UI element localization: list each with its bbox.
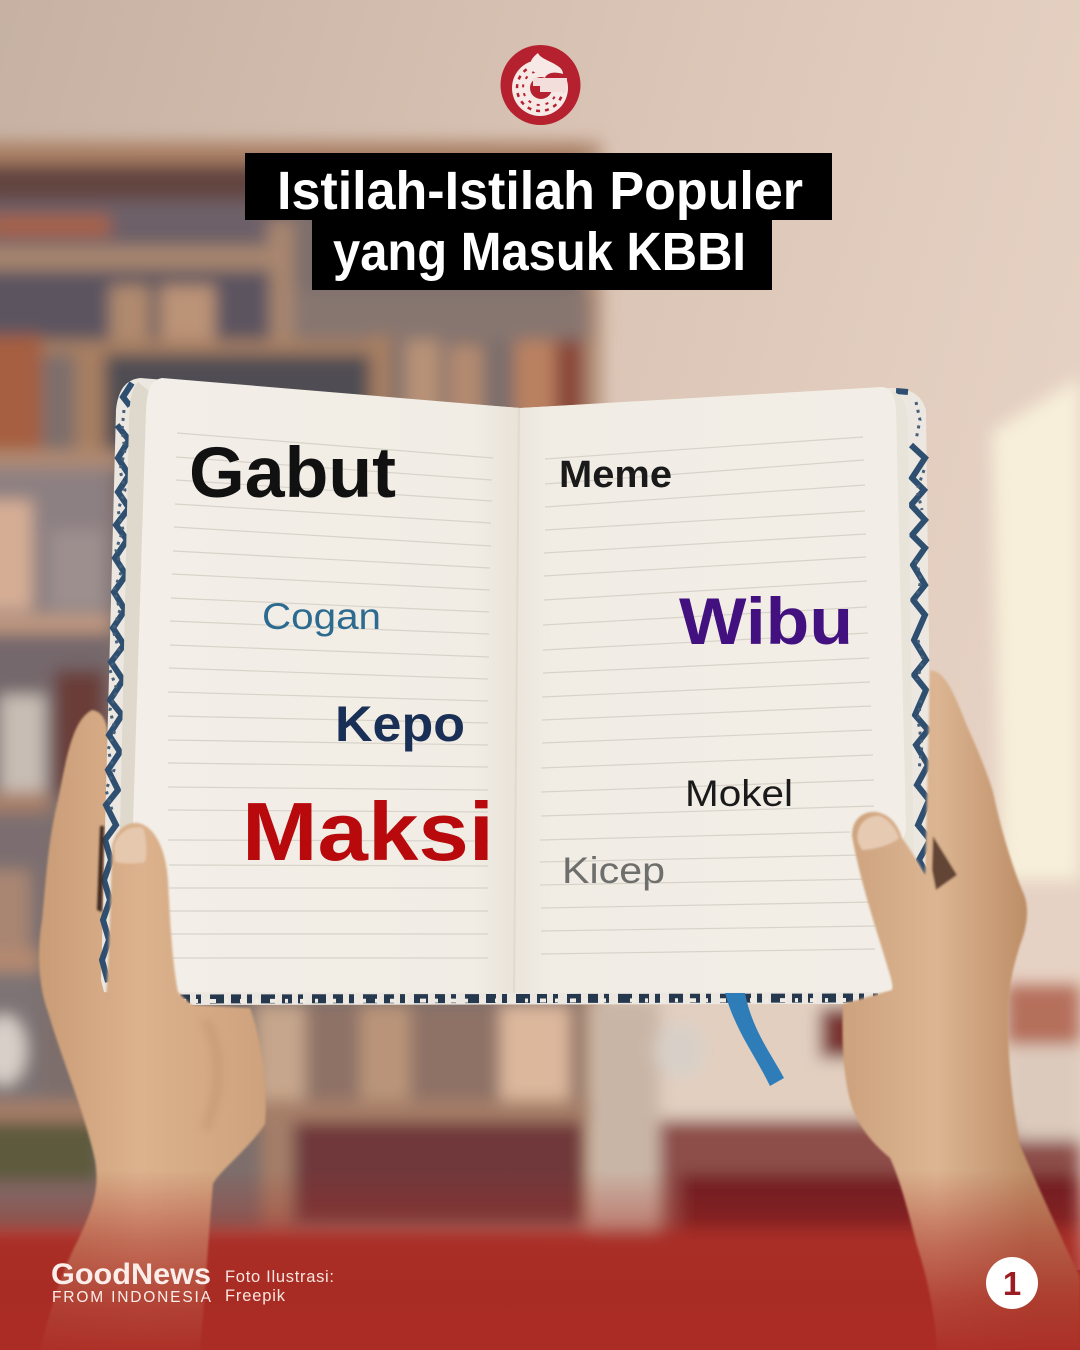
dark shadow between left finger and cover: [97, 826, 104, 912]
shadow under right thumb: [932, 836, 957, 890]
bookcase: [0, 142, 602, 1235]
left page rules: [168, 433, 493, 958]
word list: left page: Kepo: [335, 696, 465, 752]
word list: right page: Mokel: [685, 773, 793, 814]
page block edge left: [112, 382, 175, 992]
word list: right page: Meme: [559, 454, 672, 496]
brand logo text: FROM INDONESIA: [52, 1289, 212, 1306]
right cover weave grain: [916, 402, 924, 770]
bottom red gradient: [0, 1170, 1080, 1350]
word list: left page: Maksi: [242, 785, 494, 878]
blue ribbon bookmark: [725, 993, 784, 1086]
word list: right page: Wibu: [679, 584, 853, 658]
left cover weave pattern: [102, 383, 132, 982]
word list: left page: Gabut: [189, 434, 396, 513]
page number badge: 1: [1003, 1265, 1021, 1302]
left hand holding book: [39, 710, 266, 1350]
right thumb: [852, 812, 968, 1060]
word list: right page: Kicep: [562, 850, 665, 891]
patterned cover: [101, 378, 932, 1005]
word list: right page: [559, 454, 853, 891]
title: Istilah-Istilah Populer: [277, 161, 803, 221]
brand logo text: [51, 1258, 212, 1306]
brand logo text: GoodNews: [51, 1258, 211, 1291]
right cover weave pattern: [896, 391, 931, 882]
page number badge: [986, 1257, 1038, 1309]
left thumb: [106, 823, 226, 1140]
bottom cover weave pattern: [180, 998, 878, 999]
window light on wall: [992, 378, 1080, 880]
left page: [132, 378, 520, 993]
right hand: palm and arm: [843, 670, 1080, 1350]
photo credit: Freepik: [225, 1287, 286, 1305]
right thumbnail: [858, 816, 899, 850]
right page: [514, 387, 906, 993]
centre gutter: [514, 408, 519, 993]
title: yang Masuk KBBI: [333, 222, 746, 282]
left cover weave grain: [106, 410, 125, 810]
page fore-edge right: [880, 388, 914, 992]
logo: [500, 45, 580, 125]
room furniture: [0, 985, 1080, 1350]
open notebook: [101, 378, 932, 1086]
right hand holding book: [843, 670, 1080, 1350]
title: [245, 153, 832, 290]
right page rules: [540, 437, 875, 954]
left palm crease: [205, 1020, 218, 1130]
photo credit: [225, 1268, 334, 1305]
word list: left page: Cogan: [262, 596, 381, 637]
floor red base: [0, 1270, 1080, 1350]
left hand: palm and fingers behind book: [39, 710, 266, 1350]
word list: left page: [189, 434, 494, 878]
left thumbnail: [114, 827, 146, 864]
photo credit: Foto Ilustrasi:: [225, 1268, 334, 1286]
